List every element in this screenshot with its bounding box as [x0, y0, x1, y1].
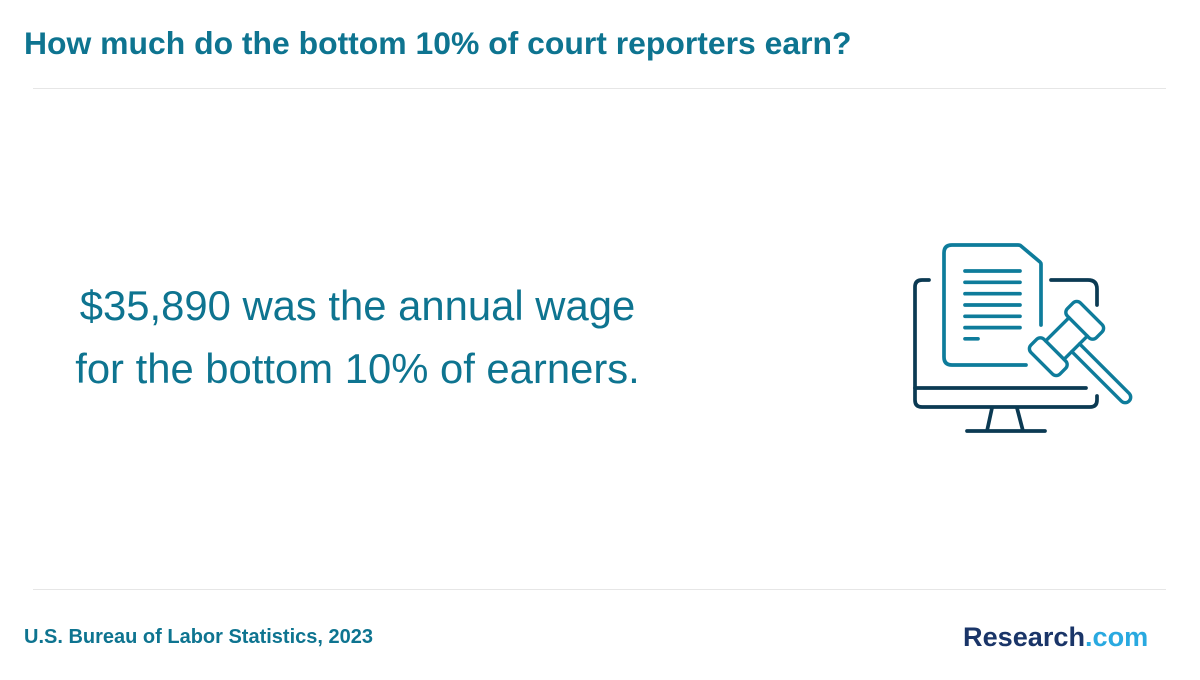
title: How much do the bottom 10% of court reporters earn?: [24, 25, 851, 61]
main statement text: for the bottom 10% of earners.: [75, 345, 640, 392]
source note: U.S. Bureau of Labor Statistics, 2023: [24, 626, 373, 648]
main statement text: $35,890 was the annual wage: [80, 282, 635, 329]
icon: document: [944, 245, 1041, 365]
icon: computer monitor: [915, 280, 1097, 431]
logo: Research.com: Research.com: [963, 621, 1148, 652]
icon: gavel: [1027, 299, 1154, 426]
main statement text: [75, 282, 640, 392]
